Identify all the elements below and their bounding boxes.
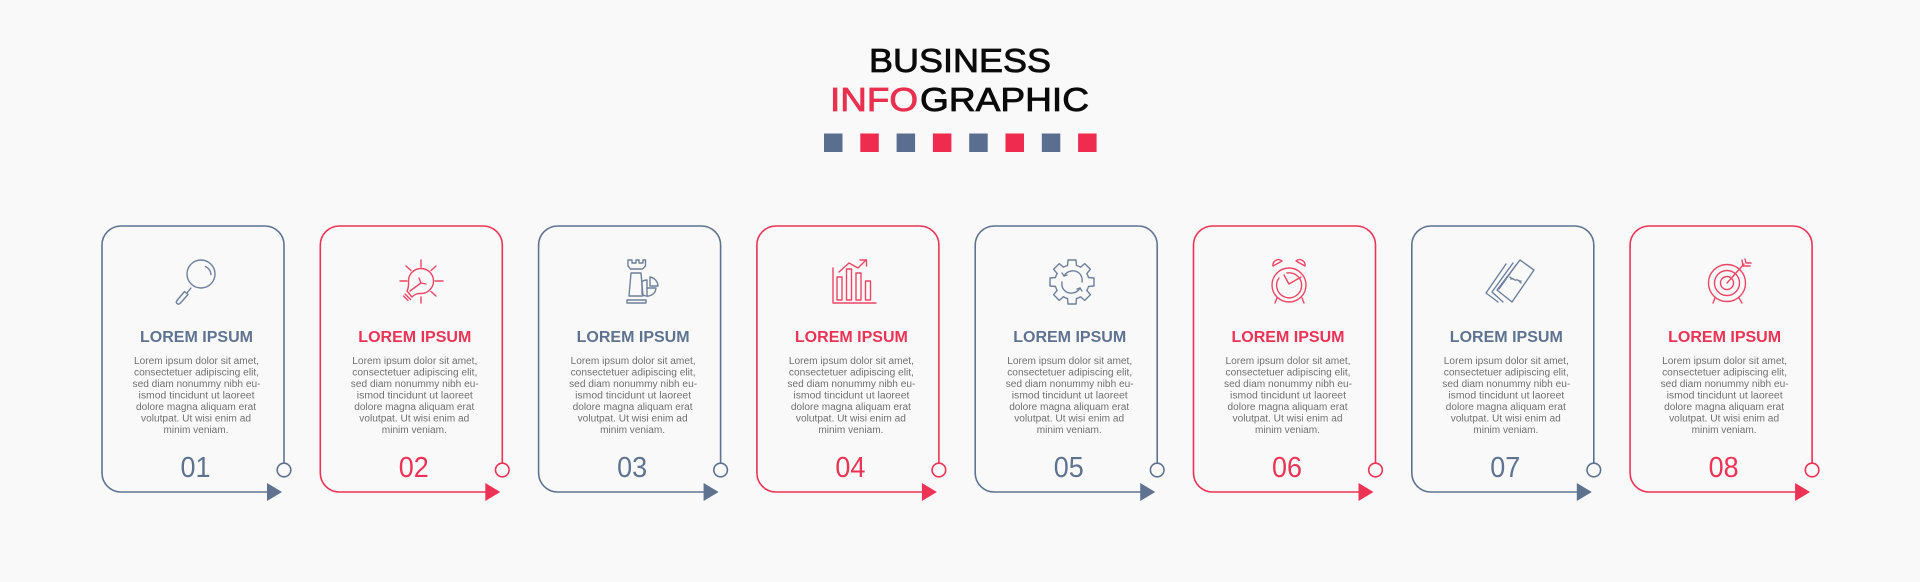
body text <box>1661 356 1789 436</box>
end circle <box>1805 463 1819 477</box>
body text: minim veniam. <box>818 425 883 436</box>
icon: gear with cycle arrows <box>1050 260 1094 304</box>
step number: 01 <box>180 452 210 484</box>
panel: step 01 <box>102 226 291 501</box>
body text: dolore magna aliquam erat <box>1664 402 1784 413</box>
body text <box>132 356 260 436</box>
body text: ismod tincidunt ut laoreet <box>1012 390 1128 401</box>
step number: 03 <box>617 452 647 484</box>
body text <box>787 356 915 436</box>
body text: dolore magna aliquam erat <box>1228 402 1348 413</box>
panel: step 08 <box>1630 226 1819 501</box>
heading: LOREM IPSUM <box>795 329 908 346</box>
step number: 04 <box>835 452 865 484</box>
icon: bar chart with rising arrow <box>833 260 876 303</box>
card frame <box>1194 226 1376 492</box>
body text: Lorem ipsum dolor sit amet, <box>1226 356 1350 367</box>
end circle <box>277 463 291 477</box>
body text: sed diam nonummy nibh eu- <box>1224 379 1352 390</box>
body text: dolore magna aliquam erat <box>1446 402 1566 413</box>
title: INFO <box>830 81 918 118</box>
heading: LOREM IPSUM <box>140 329 253 346</box>
panel: step 06 <box>1194 226 1382 501</box>
body text: ismod tincidunt ut laoreet <box>793 390 910 401</box>
title <box>830 42 1089 118</box>
body text: consectetuer adipiscing elit, <box>1444 368 1569 378</box>
arrow tip <box>267 483 282 501</box>
card frame <box>975 226 1157 492</box>
body text: consectetuer adipiscing elit, <box>1662 368 1787 378</box>
body text <box>1224 356 1352 436</box>
body text: ismod tincidunt ut laoreet <box>575 390 691 401</box>
end circle <box>932 463 946 477</box>
panel: step 03 <box>539 226 727 501</box>
heading: LOREM IPSUM <box>1668 329 1781 346</box>
body text: dolore magna aliquam erat <box>573 402 693 413</box>
body text: Lorem ipsum dolor sit amet, <box>571 356 696 367</box>
body text: dolore magna aliquam erat <box>136 402 256 413</box>
body text <box>351 356 479 436</box>
heading: LOREM IPSUM <box>358 329 471 346</box>
body text: sed diam nonummy nibh eu- <box>569 379 697 390</box>
end circle <box>496 463 509 477</box>
body text: volutpat. Ut wisi enim ad <box>359 413 469 424</box>
panel: step 07 <box>1412 226 1601 501</box>
icon: magnifying glass <box>176 260 215 304</box>
body text: sed diam nonummy nibh eu- <box>787 379 915 390</box>
body text: consectetuer adipiscing elit, <box>352 368 477 378</box>
card frame <box>320 226 502 492</box>
arrow tip <box>1577 483 1592 501</box>
end circle <box>714 463 727 477</box>
body text: minim veniam. <box>1037 425 1102 436</box>
step number: 05 <box>1054 452 1084 484</box>
body text: consectetuer adipiscing elit, <box>571 368 696 378</box>
icon: chess rook with pie <box>627 260 658 303</box>
body text: dolore magna aliquam erat <box>354 402 475 413</box>
arrow tip <box>922 483 937 501</box>
body text: sed diam nonummy nibh eu- <box>351 379 479 390</box>
icon: stack of banknotes <box>1486 260 1534 302</box>
body text: sed diam nonummy nibh eu- <box>1442 379 1570 390</box>
body text: volutpat. Ut wisi enim ad <box>1232 413 1342 424</box>
body text: Lorem ipsum dolor sit amet, <box>134 356 259 367</box>
panel: step 02 <box>320 226 509 501</box>
body text: minim veniam. <box>382 425 447 436</box>
heading: LOREM IPSUM <box>577 329 690 346</box>
body text: ismod tincidunt ut laoreet <box>357 390 473 401</box>
heading: LOREM IPSUM <box>1450 329 1563 346</box>
body text: volutpat. Ut wisi enim ad <box>1451 413 1561 424</box>
body text: minim veniam. <box>1255 425 1320 436</box>
card frame <box>1412 226 1594 492</box>
end circle <box>1369 463 1382 477</box>
body text: minim veniam. <box>1473 425 1538 436</box>
body text: Lorem ipsum dolor sit amet, <box>1007 356 1132 367</box>
body text: sed diam nonummy nibh eu- <box>132 379 260 390</box>
arrow tip <box>704 483 719 501</box>
body text: dolore magna aliquam erat <box>791 402 911 413</box>
end circle <box>1150 463 1164 477</box>
body text: Lorem ipsum dolor sit amet, <box>1444 356 1569 367</box>
body text: volutpat. Ut wisi enim ad <box>796 413 906 424</box>
body text: minim veniam. <box>1692 425 1757 436</box>
arrow tip <box>1358 483 1374 501</box>
step number: 08 <box>1709 452 1739 484</box>
body text: consectetuer adipiscing elit, <box>1007 368 1132 378</box>
body text: volutpat. Ut wisi enim ad <box>1014 413 1124 424</box>
heading: LOREM IPSUM <box>1232 329 1344 346</box>
icon: alarm clock <box>1272 260 1306 303</box>
step number: 06 <box>1272 452 1302 484</box>
icon: target with arrow <box>1708 259 1751 303</box>
body text: volutpat. Ut wisi enim ad <box>578 413 688 424</box>
body text: ismod tincidunt ut laoreet <box>1230 390 1346 401</box>
card frame <box>757 226 939 492</box>
heading: LOREM IPSUM <box>1013 329 1126 346</box>
body text: Lorem ipsum dolor sit amet, <box>789 356 914 367</box>
body text: consectetuer adipiscing elit, <box>789 368 914 378</box>
body text: minim veniam. <box>600 425 665 436</box>
body text: Lorem ipsum dolor sit amet, <box>352 356 477 367</box>
body text: sed diam nonummy nibh eu- <box>1661 379 1789 390</box>
body text: Lorem ipsum dolor sit amet, <box>1662 356 1787 367</box>
body text: consectetuer adipiscing elit, <box>134 368 259 378</box>
panel: step 04 <box>757 226 946 501</box>
body text: ismod tincidunt ut laoreet <box>138 390 255 401</box>
title: GRAPHIC <box>920 81 1089 118</box>
body text: volutpat. Ut wisi enim ad <box>141 413 251 424</box>
body text: consectetuer adipiscing elit, <box>1226 368 1350 378</box>
card frame <box>102 226 284 492</box>
title: BUSINESS <box>869 42 1051 79</box>
end circle <box>1587 463 1601 477</box>
arrow tip <box>485 483 500 501</box>
card frame <box>1630 226 1812 492</box>
body text <box>1006 356 1134 436</box>
panel: step 05 <box>975 226 1164 501</box>
step number: 02 <box>399 452 429 484</box>
body text <box>569 356 697 436</box>
body text: sed diam nonummy nibh eu- <box>1006 379 1134 390</box>
step number: 07 <box>1490 452 1520 484</box>
arrow tip <box>1140 483 1155 501</box>
body text <box>1442 356 1570 436</box>
body text: ismod tincidunt ut laoreet <box>1667 390 1783 401</box>
card frame <box>539 226 721 492</box>
arrow tip <box>1795 483 1810 501</box>
body text: volutpat. Ut wisi enim ad <box>1669 413 1779 424</box>
title square row <box>824 134 1097 152</box>
icon: light bulb with clock <box>400 260 443 303</box>
body text: ismod tincidunt ut laoreet <box>1448 390 1565 401</box>
body text: minim veniam. <box>164 425 228 436</box>
body text: dolore magna aliquam erat <box>1009 402 1129 413</box>
